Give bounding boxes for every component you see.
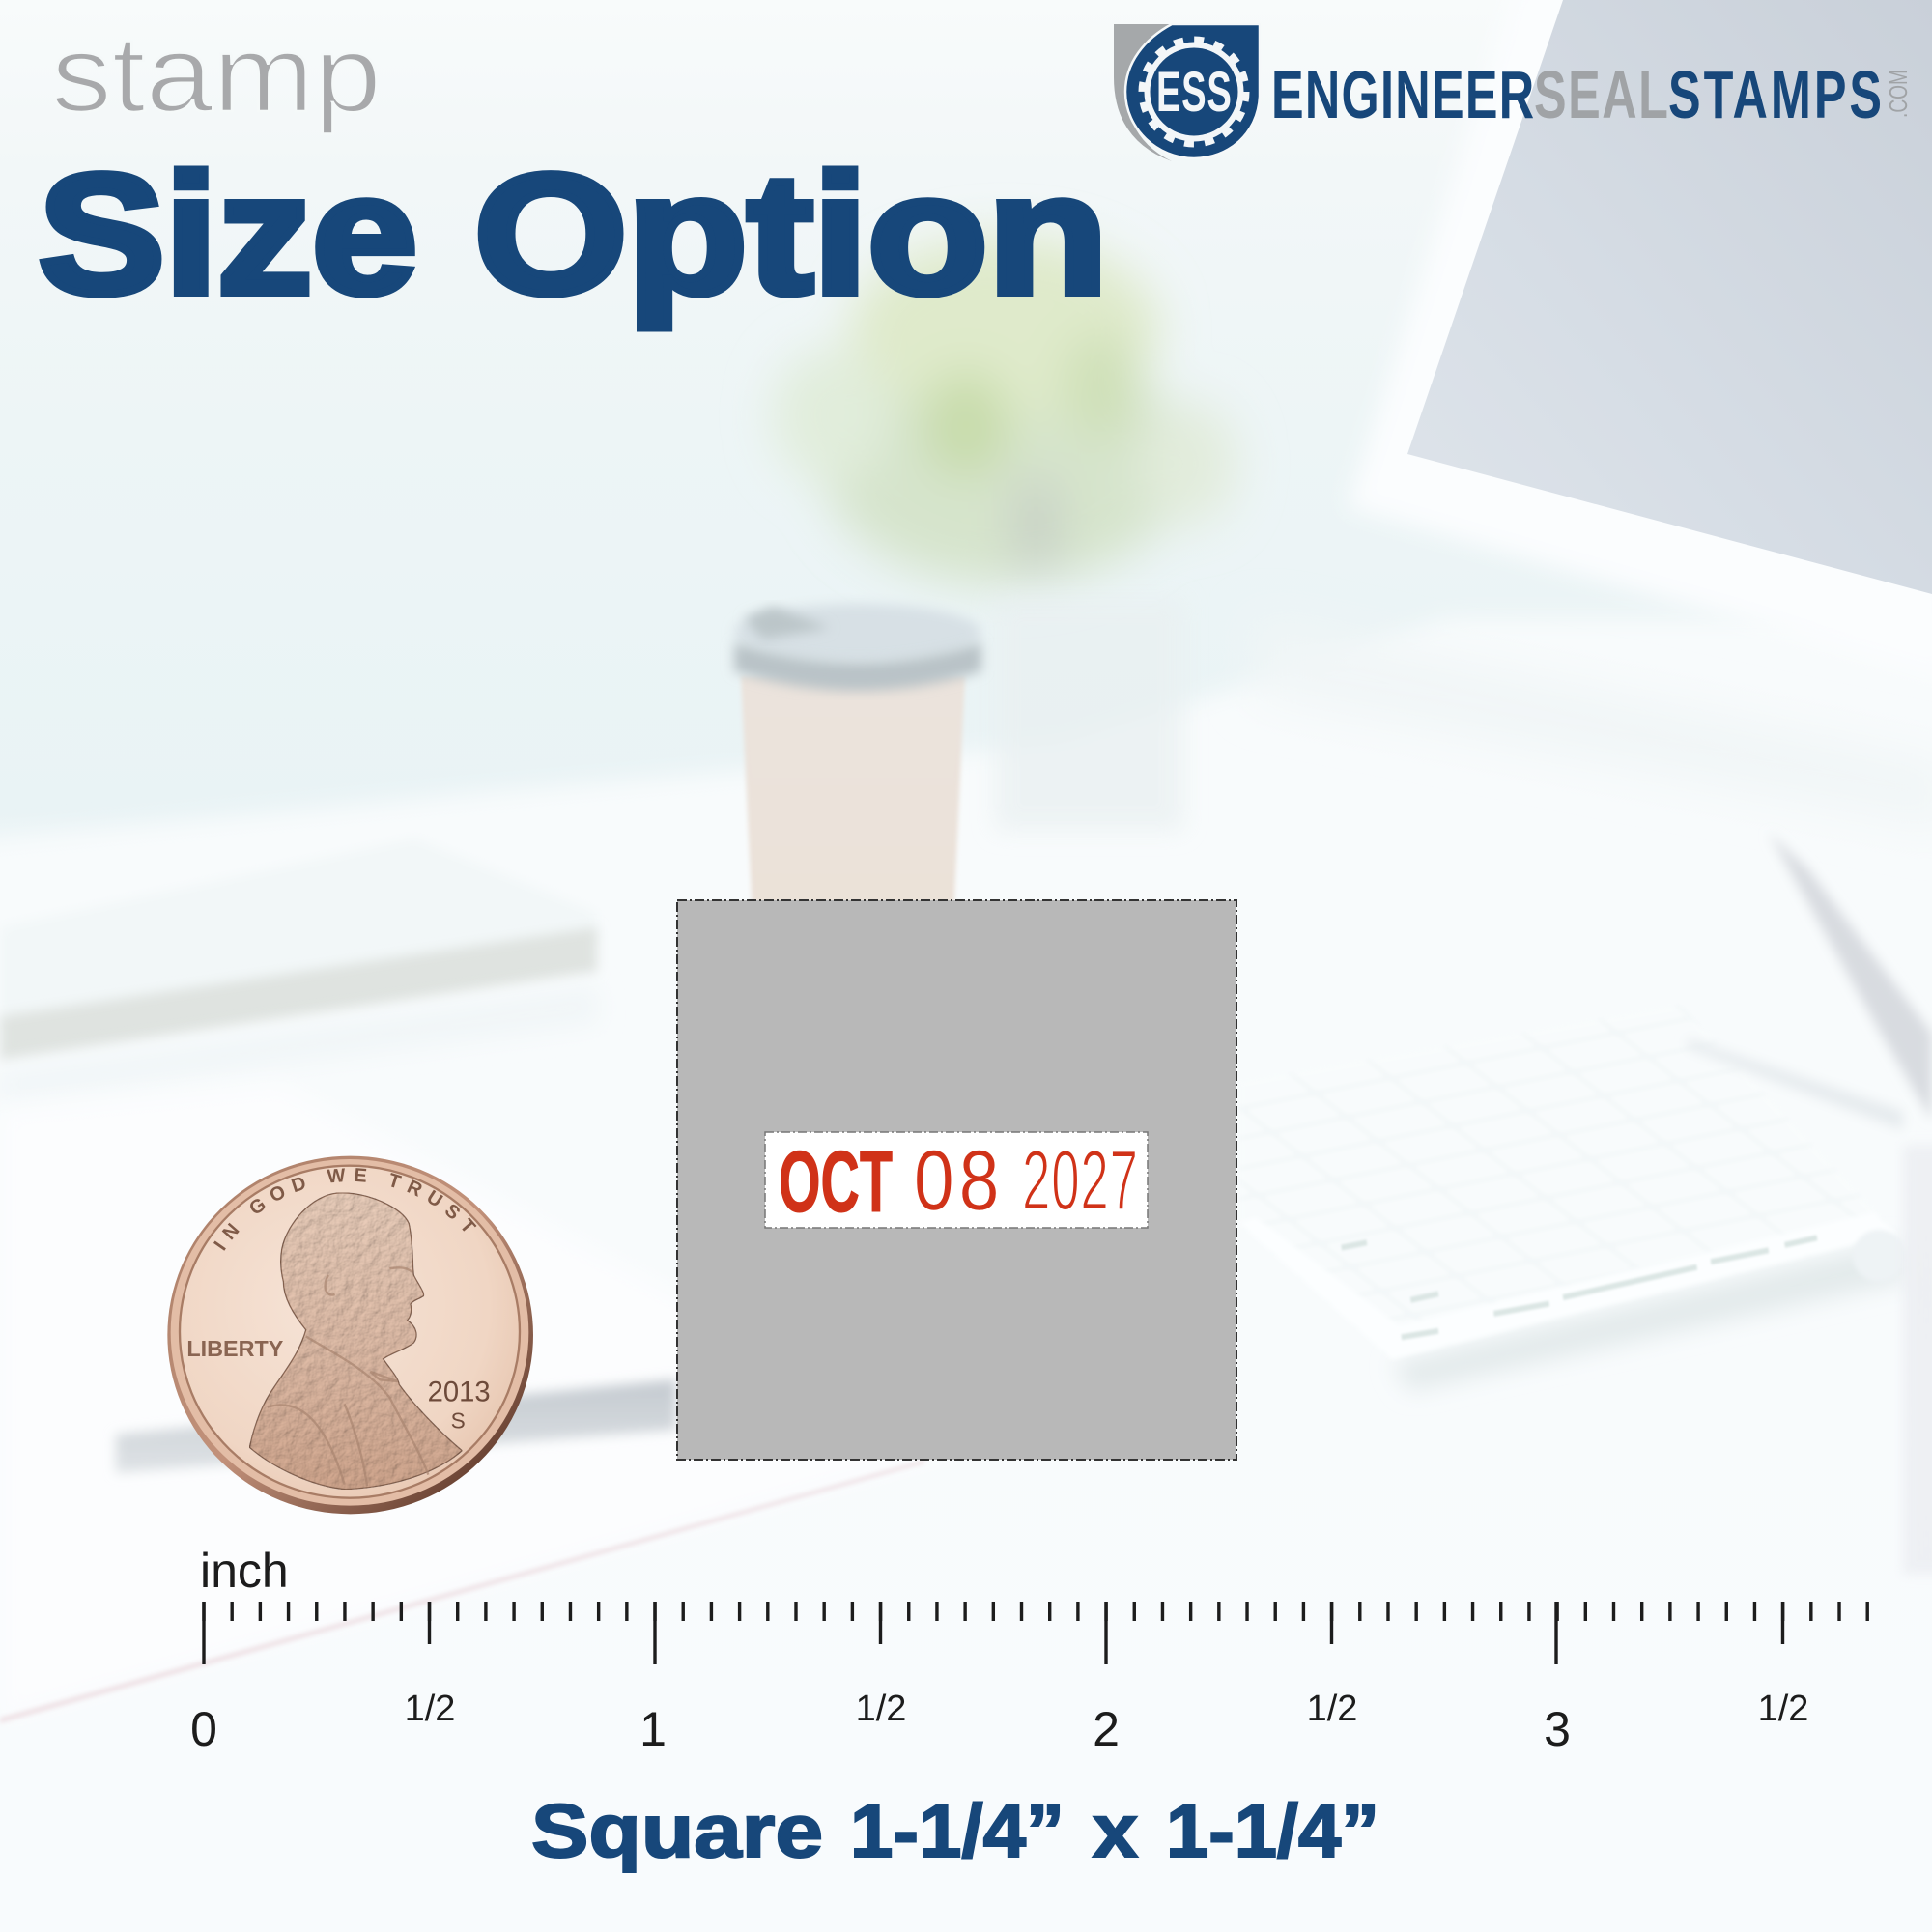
logo wordmark: .COM <box>1884 70 1913 118</box>
logo wordmark: SEAL <box>1534 57 1668 132</box>
stamp imprint <box>765 1132 1148 1231</box>
inch numbers: 1 <box>639 1702 667 1756</box>
size caption: x <box>1093 1788 1138 1873</box>
IN GOD WE TRUST: IN GOD WE TRUST <box>213 1168 477 1251</box>
half inch labels: 1/2 <box>405 1689 455 1729</box>
penny coin <box>167 1155 533 1515</box>
title: Size Option: Option <box>474 140 1108 329</box>
half inch labels <box>405 1689 1808 1729</box>
imprint white background <box>765 1132 1148 1228</box>
size caption <box>531 1788 1379 1873</box>
year: 2013 <box>428 1377 491 1408</box>
logo wordmark: ENGINEER <box>1271 57 1534 132</box>
coin face <box>180 1166 520 1498</box>
gray stamp size square <box>677 900 1236 1460</box>
LIBERTY: LIBERTY <box>186 1336 283 1361</box>
logo wordmark <box>1271 57 1913 132</box>
date text: OCT <box>779 1134 893 1231</box>
half inch labels: 1/2 <box>856 1689 906 1729</box>
logo wordmark: STAMPS <box>1668 57 1882 132</box>
coin rim <box>167 1156 533 1514</box>
inch numbers <box>190 1702 1571 1756</box>
mint mark: S <box>451 1407 466 1433</box>
inch numbers: 0 <box>190 1702 217 1756</box>
inch numbers: 3 <box>1544 1702 1571 1756</box>
logo shield emblem <box>1114 24 1260 161</box>
coin rim highlight <box>171 1159 528 1506</box>
date text: 08 <box>914 1133 999 1228</box>
half inch labels: 1/2 <box>1758 1689 1808 1729</box>
size caption: 1-1/4” <box>1166 1788 1379 1873</box>
logo: Engineer Seal Stamps <box>1114 24 1913 161</box>
inch numbers: 2 <box>1093 1702 1120 1756</box>
logo shield emblem: ESS <box>1156 62 1232 124</box>
size caption: 1-1/4” <box>850 1788 1065 1873</box>
half inch ticks <box>429 1602 1783 1644</box>
ruler <box>190 1544 1870 1756</box>
Lincoln bust <box>249 1193 462 1490</box>
half inch labels: 1/2 <box>1307 1689 1357 1729</box>
title: Size Option <box>39 140 1108 329</box>
title: Size Option: Size <box>39 140 417 329</box>
hair and coat shading <box>268 1267 428 1486</box>
unit label: inch <box>200 1544 289 1598</box>
date text: 2027 <box>1022 1133 1138 1228</box>
inch ticks <box>204 1602 1556 1664</box>
date text <box>779 1133 1138 1231</box>
size caption: Square <box>531 1788 823 1873</box>
ruler minor ticks <box>202 1602 1870 1621</box>
subtitle: stamp: stamp <box>51 14 382 134</box>
